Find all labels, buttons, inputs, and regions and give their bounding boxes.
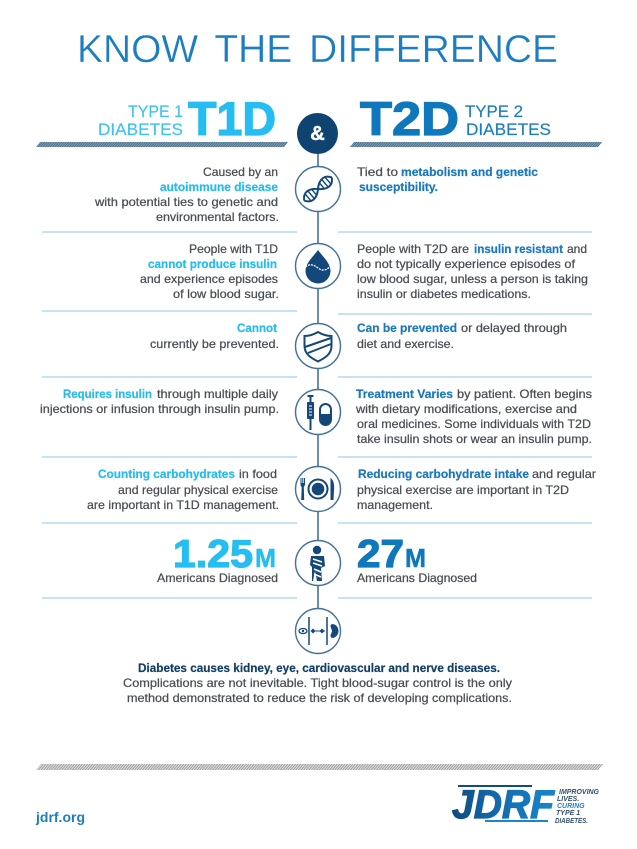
heading: type 1 diabetes <box>98 92 276 145</box>
stat: T2D diagnosed: Americans Diagnosed <box>357 571 477 585</box>
title: KNOW THE DIFFERENCE <box>77 28 558 71</box>
complications note: Diabetes causes kidney, eye, cardiovascular and nerve diseases. <box>138 661 500 675</box>
JDRF logo: IMPROVING <box>559 789 600 796</box>
row 5 left: management T1D: in food <box>239 467 277 481</box>
row 3 right: prevention T2D: or delayed through <box>461 321 567 335</box>
row 1 left: cause of T1D: environmental factors. <box>156 210 279 224</box>
row 2 left: insulin T1D: People with T1D <box>189 242 278 256</box>
row 1 right: cause of T2D: susceptibility. <box>359 180 438 194</box>
heading: type 2 diabetes: TYPE 2 <box>465 102 523 121</box>
icon: person with dna <box>296 540 340 586</box>
icon: plate and cutlery <box>296 466 340 512</box>
icon: syringe and capsule <box>296 390 340 434</box>
row 4 left: treatment T1D: Requires insulin <box>63 387 152 401</box>
icon: shield <box>296 324 340 368</box>
row 4 right: treatment T2D: by patient. Often begins <box>457 387 592 401</box>
row 2 right: insulin T2D: low blood sugar, unless a person is taking <box>357 272 588 286</box>
row 5 right: management T2D: and regular <box>532 467 596 481</box>
heading: type 2 diabetes <box>360 92 551 145</box>
row 2 left: insulin T1D: and experience episodes <box>140 272 278 286</box>
row 4 left: treatment T1D: through multiple daily <box>157 387 278 401</box>
heading: type 1 diabetes: T1D <box>188 92 276 145</box>
stat: T1D diagnosed: 1.25 <box>173 533 253 576</box>
row 4 left: treatment T1D <box>40 387 279 416</box>
heading: type 2 diabetes: T2D <box>360 92 459 145</box>
row 2 left: insulin T1D: cannot produce insulin <box>148 257 277 271</box>
complications note <box>123 661 512 705</box>
JDRF logo: LIVES. <box>557 796 579 803</box>
icon: dna <box>296 166 340 212</box>
stat: T2D diagnosed: 27 <box>357 533 404 576</box>
row 1 right: cause of T2D: Tied to <box>357 165 398 179</box>
JDRF logo: DIABETES. <box>555 818 588 825</box>
row 3 right: prevention T2D: diet and exercise. <box>357 337 454 351</box>
row 1 left: cause of T1D: with potential ties to genetic and <box>94 195 278 209</box>
row 1 left: cause of T1D <box>94 165 279 224</box>
icon: complications <box>296 608 340 654</box>
row 2 left: insulin T1D <box>140 242 279 301</box>
row 5 right: management T2D <box>357 467 596 512</box>
ampersand badge <box>297 113 338 154</box>
row 1 right: cause of T2D: metabolism and genetic <box>401 165 538 179</box>
row 2 right: insulin T2D: People with T2D are <box>357 242 469 256</box>
row 5 right: management T2D: physical exercise are important in T2D <box>357 483 569 497</box>
row 3 left: prevention T1D: Cannot <box>237 321 277 335</box>
row 1 left: cause of T1D: Caused by an <box>203 165 278 179</box>
row 5 left: management T1D: Counting carbohydrates <box>98 467 235 481</box>
stat: T2D diagnosed <box>357 533 477 585</box>
complications note: Complications are not inevitable. Tight blood-sugar control is the only <box>123 676 512 690</box>
row 5 left: management T1D: and regular physical exercise <box>118 483 278 497</box>
JDRF logo: TYPE 1 <box>556 810 580 817</box>
stat: T1D diagnosed <box>157 533 278 585</box>
JDRF logo: CURING <box>557 803 585 810</box>
row 3 left: prevention T1D <box>150 321 279 351</box>
stat: T1D diagnosed: Americans Diagnosed <box>157 571 278 585</box>
row 2 right: insulin T2D: do not typically experience episodes of <box>357 257 576 271</box>
row 1 left: cause of T1D: autoimmune disease <box>160 180 278 194</box>
website link: jdrf.org <box>35 810 85 825</box>
row 3 right: prevention T2D: Can be prevented <box>357 321 457 335</box>
row 3 left: prevention T1D: currently be prevented. <box>150 337 279 351</box>
stat: T1D diagnosed: M <box>255 543 276 573</box>
row 3 right: prevention T2D <box>357 321 567 351</box>
heading: type 1 diabetes: TYPE 1 <box>128 102 183 121</box>
row 4 right: treatment T2D: take insulin shots or wear an insulin pump. <box>357 432 592 446</box>
complications note: method demonstrated to reduce the risk of developing complications. <box>127 691 512 705</box>
row 4 left: treatment T1D: injections or infusion through insulin pump. <box>40 402 279 416</box>
row 4 right: treatment T2D: oral medicines. Some individuals with T2D <box>357 417 591 431</box>
row 5 left: management T1D <box>87 467 279 512</box>
row 4 right: treatment T2D: Treatment Varies <box>356 387 453 401</box>
row 2 right: insulin T2D: insulin or diabetes medications. <box>357 287 531 301</box>
ampersand badge: & <box>310 123 325 145</box>
icon: blood drop <box>296 244 340 288</box>
row 2 right: insulin T2D <box>357 242 588 301</box>
row 5 right: management T2D: Reducing carbohydrate intake <box>358 467 529 481</box>
row 2 right: insulin T2D: insulin resistant <box>474 242 563 256</box>
row 2 right: insulin T2D: and <box>567 242 587 256</box>
row 5 right: management T2D: management. <box>357 498 433 512</box>
row 4 right: treatment T2D: with dietary modifications, exercise and <box>355 402 577 416</box>
row 2 left: insulin T1D: of low blood sugar. <box>173 287 279 301</box>
stat: T2D diagnosed: M <box>405 543 426 573</box>
heading: type 1 diabetes: DIABETES <box>98 120 183 139</box>
heading: type 2 diabetes: DIABETES <box>466 120 551 139</box>
row 5 left: management T1D: are important in T1D management. <box>87 498 279 512</box>
JDRF logo: JDRF <box>452 783 556 827</box>
row 1 right: cause of T2D <box>357 165 538 194</box>
row 4 right: treatment T2D <box>355 387 592 446</box>
